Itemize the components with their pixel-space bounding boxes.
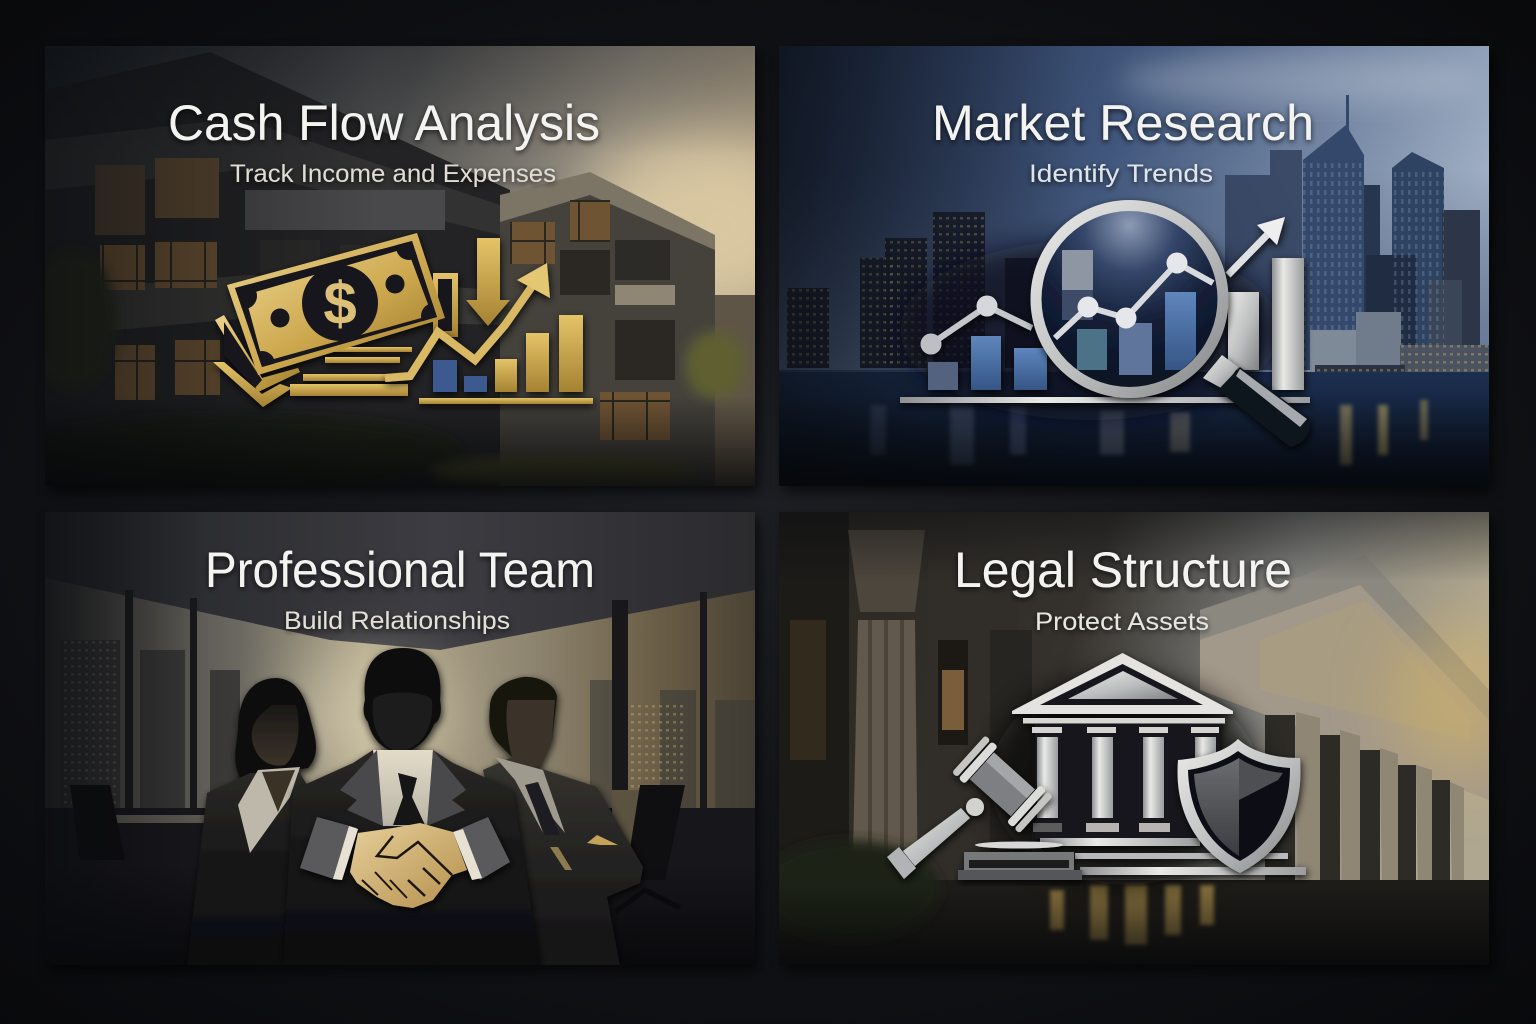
heading: Cash Flow Analysis: Cash Flow Analysis <box>168 95 600 151</box>
panel: Professional Team <box>45 512 759 971</box>
shrubs <box>60 259 118 356</box>
background: office with city windows <box>45 512 755 965</box>
background: city skyline over water <box>779 46 1489 486</box>
chart: bars and trend line <box>900 217 1310 403</box>
subheading: Identify Trends: Identify Trends <box>1029 160 1213 188</box>
figure: woman silhouette <box>190 676 323 941</box>
background: apartment building photo <box>45 46 755 486</box>
icon: gold banknotes <box>213 233 458 407</box>
icon: falling arrow <box>466 238 510 326</box>
icon: magnifying glass <box>1030 200 1310 447</box>
chart: rising line and bars <box>385 263 593 404</box>
icon shadow <box>900 240 1280 420</box>
icon: handshake <box>300 817 510 908</box>
figure: centre man silhouette <box>283 648 540 965</box>
subheading: Build Relationships: Build Relationships <box>284 607 510 635</box>
panel: Cash Flow Analysis <box>45 46 760 494</box>
icon: gold banknotes: $ <box>323 270 357 337</box>
panel: Legal Structure <box>760 512 1530 971</box>
heading: Market Research: Market Research <box>932 95 1314 151</box>
water <box>779 372 1489 486</box>
icon: classical bank building <box>1012 653 1306 875</box>
icon: shield <box>1178 739 1301 873</box>
background: courthouse columns <box>760 512 1530 965</box>
icon shadow <box>990 675 1260 885</box>
windows <box>95 158 675 440</box>
subheading: Track Income and Expenses: Track Income and Expenses <box>230 160 556 188</box>
water reflections <box>870 400 1428 465</box>
subheading: Protect Assets: Protect Assets <box>1035 608 1209 636</box>
heading: Professional Team: Professional Team <box>205 542 595 598</box>
heading: Legal Structure: Legal Structure <box>954 542 1292 598</box>
icon: gavel <box>887 735 1053 879</box>
panel: Market Research <box>779 46 1493 492</box>
figure: right man silhouette <box>483 677 643 965</box>
icon: sound block <box>958 842 1082 880</box>
